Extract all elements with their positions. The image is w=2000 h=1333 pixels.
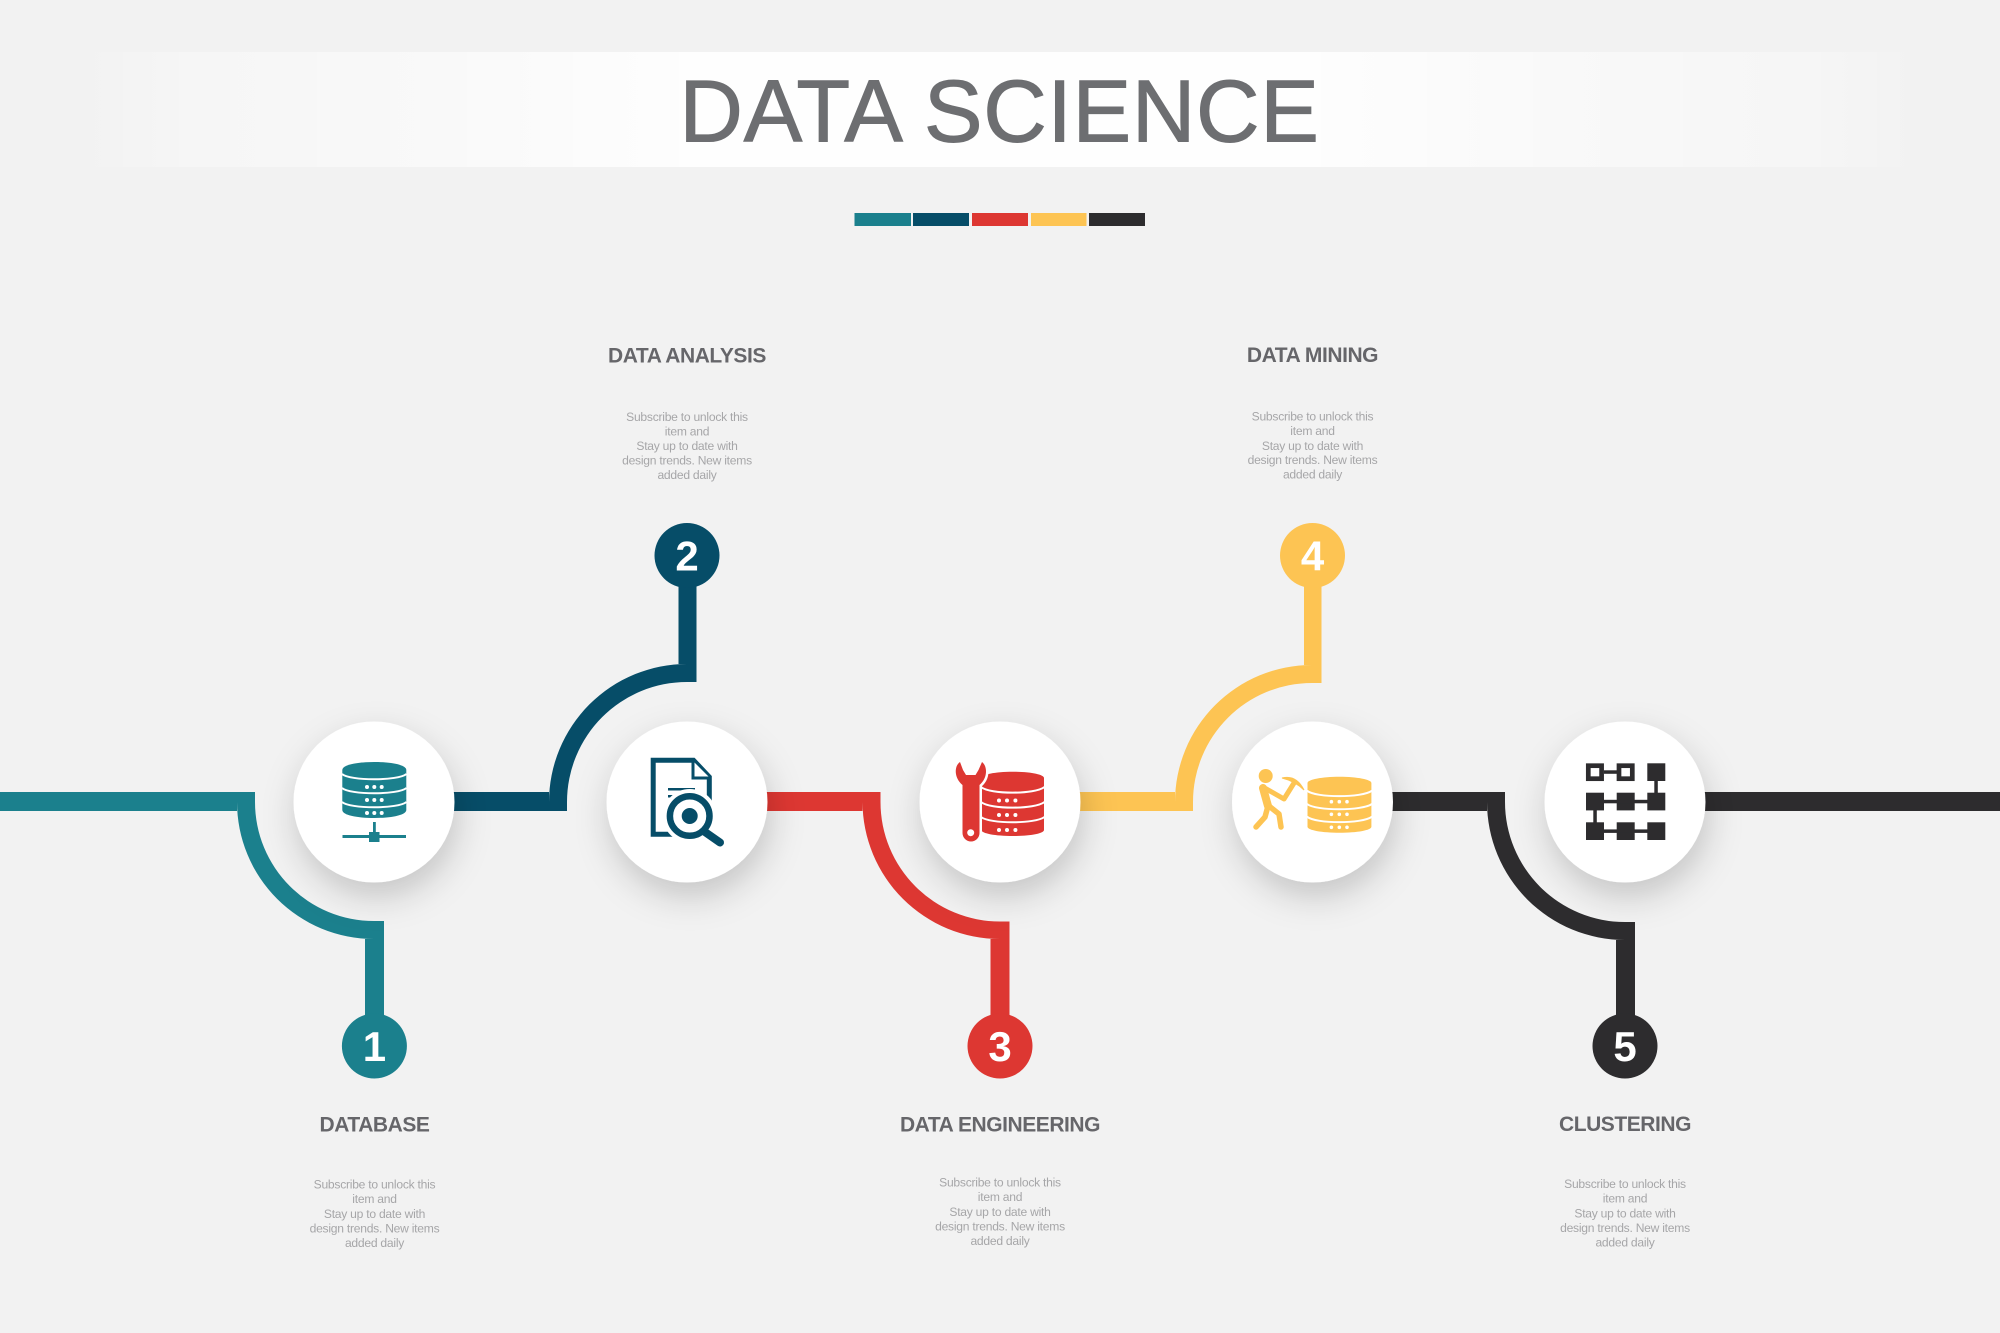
text: data engineering: added daily — [970, 1234, 1031, 1248]
connector 5: dark — [1312, 792, 1635, 1046]
badge 1 — [342, 1014, 407, 1078]
badge 4: 4 — [1301, 532, 1325, 580]
icon: wrench and database — [956, 762, 1044, 842]
heading: data mining: DATA MINING — [1247, 344, 1378, 367]
text: data mining: added daily — [1283, 468, 1343, 482]
colour legend bar — [854, 213, 1145, 226]
white circle 5 — [1544, 722, 1706, 882]
title band — [80, 52, 1920, 167]
white circle 2 — [606, 722, 768, 882]
heading: database: DATABASE — [320, 1114, 430, 1136]
text: data analysis: design trends. New items — [622, 454, 752, 468]
connector 3: red — [687, 792, 1010, 1046]
badge 2: 2 — [675, 532, 699, 580]
heading: data analysis: DATA ANALYSIS — [608, 344, 766, 368]
connector 4: yellow — [1000, 555, 1322, 811]
text: data mining: design trends. New items — [1248, 453, 1378, 467]
text: data mining: Subscribe to unlock this — [1252, 410, 1374, 424]
text: database: design trends. New items — [310, 1222, 440, 1236]
text: data analysis: Subscribe to unlock this — [626, 410, 748, 424]
white circle 4 — [1232, 722, 1393, 882]
icon: document with magnifier — [653, 760, 720, 843]
title: DATA SCIENCE — [679, 62, 1320, 160]
icon: cluster grid — [1586, 763, 1665, 840]
text: clustering: added daily — [1595, 1236, 1656, 1250]
text: database — [310, 1178, 440, 1250]
text: clustering: design trends. New items — [1560, 1221, 1690, 1235]
text: data engineering: item and — [978, 1190, 1022, 1204]
badge 1: 1 — [363, 1023, 386, 1070]
heading: clustering: CLUSTERING — [1559, 1113, 1691, 1136]
text: data analysis: Stay up to date with — [636, 439, 738, 453]
text: data mining — [1248, 410, 1378, 482]
badge 3: 3 — [988, 1023, 1012, 1070]
line end: dark to right edge — [1625, 792, 2000, 811]
text: data analysis: item and — [665, 424, 709, 438]
badge 3 — [968, 1014, 1032, 1078]
connector 1: teal — [0, 792, 384, 1046]
text: database: Subscribe to unlock this — [314, 1178, 436, 1192]
text: data analysis: added daily — [657, 468, 718, 482]
text: data mining: Stay up to date with — [1262, 439, 1363, 453]
text: database: added daily — [345, 1236, 405, 1250]
icon: database network — [342, 762, 406, 842]
white circle 3 — [920, 722, 1080, 882]
icon: miner and database — [1256, 769, 1372, 833]
white circle 1 — [294, 722, 454, 882]
text: data analysis — [622, 410, 752, 482]
text: data engineering: Subscribe to unlock this — [939, 1176, 1061, 1190]
text: data engineering — [935, 1176, 1065, 1248]
badge 5 — [1592, 1014, 1658, 1078]
heading: data engineering: DATA ENGINEERING — [900, 1114, 1100, 1136]
text: clustering: item and — [1603, 1192, 1647, 1206]
text: database: Stay up to date with — [324, 1207, 425, 1221]
connector 2: navy — [374, 555, 696, 811]
text: data mining: item and — [1290, 424, 1335, 438]
text: data engineering: design trends. New items — [935, 1220, 1065, 1234]
badge 4 — [1280, 523, 1345, 588]
text: clustering: Subscribe to unlock this — [1564, 1177, 1686, 1191]
text: database: item and — [352, 1192, 397, 1206]
text: clustering — [1560, 1177, 1690, 1250]
badge 2 — [654, 523, 720, 588]
text: clustering: Stay up to date with — [1574, 1206, 1676, 1220]
text: data engineering: Stay up to date with — [949, 1205, 1051, 1219]
badge 5: 5 — [1613, 1023, 1637, 1070]
